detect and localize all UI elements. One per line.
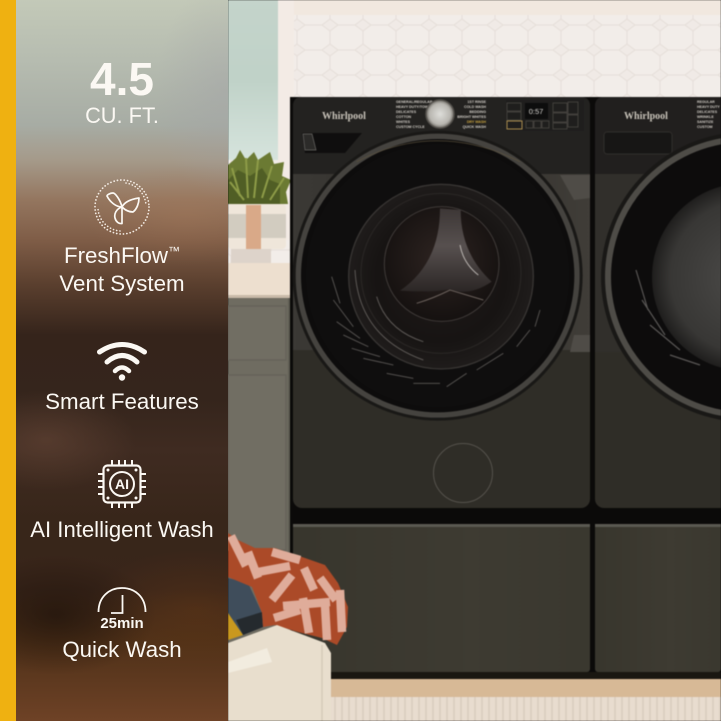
cycle labels: QUICK WASH [463, 125, 486, 129]
cycle labels: DELICATES [396, 110, 417, 114]
counter [228, 263, 294, 298]
text: FreshFlow Vent System: Vent System [59, 271, 185, 296]
inner drum [384, 207, 499, 321]
floor [228, 668, 721, 721]
icon: wifi [97, 342, 147, 381]
cycle labels: WHITES [396, 120, 411, 124]
cycle labels: HEAVY DUTY [697, 105, 720, 109]
control panel [302, 100, 584, 153]
text: capacity unit: CU. FT. [85, 103, 159, 128]
rug [330, 697, 721, 721]
basket handle [228, 648, 272, 673]
window [228, 0, 294, 240]
laundry basket [228, 533, 348, 721]
cycle labels: HEAVY DUTY/TOWELS [396, 105, 436, 109]
Whirlpool logo: Whirlpool [322, 111, 366, 122]
heading: capacity value: 4.5 [90, 53, 154, 105]
cycle labels: COTTON [396, 115, 412, 119]
cabinet [228, 298, 294, 643]
dark gap behind machines [290, 97, 721, 672]
drum paddle [400, 208, 492, 292]
cycle labels: 1ST RINSE [467, 100, 487, 104]
cycle labels: WRINKLE [697, 115, 714, 119]
icon: FreshFlow fan [94, 179, 150, 235]
dial [426, 100, 454, 128]
basket bin [228, 625, 331, 721]
dryer body [595, 97, 721, 508]
yellow accent bar [0, 0, 16, 721]
icon: 25 minute timer [98, 587, 146, 632]
cycle labels: SANITIZE [697, 120, 714, 124]
plant in pot [228, 150, 291, 266]
cycle labels: GENERAL/REGULAR [396, 100, 433, 104]
text: FreshFlow Vent System [59, 243, 185, 296]
cycle labels: CUSTOM [697, 125, 713, 129]
door glass swirl highlights [332, 277, 540, 387]
text: FreshFlow Vent System: FreshFlow™ [64, 243, 180, 268]
cycle labels: CUSTOM CYCLE [396, 125, 425, 129]
cycle labels [396, 100, 487, 129]
blue clothes [228, 578, 263, 635]
top trim [275, 0, 721, 15]
text: Smart Features: Smart Features [45, 389, 199, 414]
text: Quick Wash: Quick Wash [62, 637, 182, 662]
display panel [506, 100, 584, 131]
washer body [228, 97, 721, 721]
panel: feature sidebar [16, 0, 228, 721]
tiled wall [228, 0, 721, 300]
cycle labels: DELICATES [697, 110, 718, 114]
dryer pedestal [595, 524, 721, 672]
icon: 25 minute timer: 25min [100, 615, 144, 632]
cycle labels: BRIGHT WHITES [457, 115, 487, 119]
red towel [228, 533, 348, 645]
cycle labels: COLD WASH [464, 105, 486, 109]
washer pedestal [293, 524, 590, 672]
yellow cloth [228, 613, 243, 640]
text: AI Intelligent Wash: AI Intelligent Wash [30, 517, 214, 542]
cycle labels: DRY WASH [467, 120, 486, 124]
washer door [293, 131, 583, 421]
glass bowl [349, 184, 533, 369]
cycle labels: BEDDING [469, 110, 486, 114]
detergent door circle [434, 444, 492, 502]
Whirlpool logo: Whirlpool [624, 111, 668, 122]
cycle labels: REGULAR [697, 100, 715, 104]
display panel: 0:57 [529, 107, 543, 116]
cycle labels [697, 100, 720, 129]
dryer door [601, 132, 721, 422]
icon: AI chip [98, 460, 146, 508]
icon: AI chip: AI [115, 476, 129, 492]
